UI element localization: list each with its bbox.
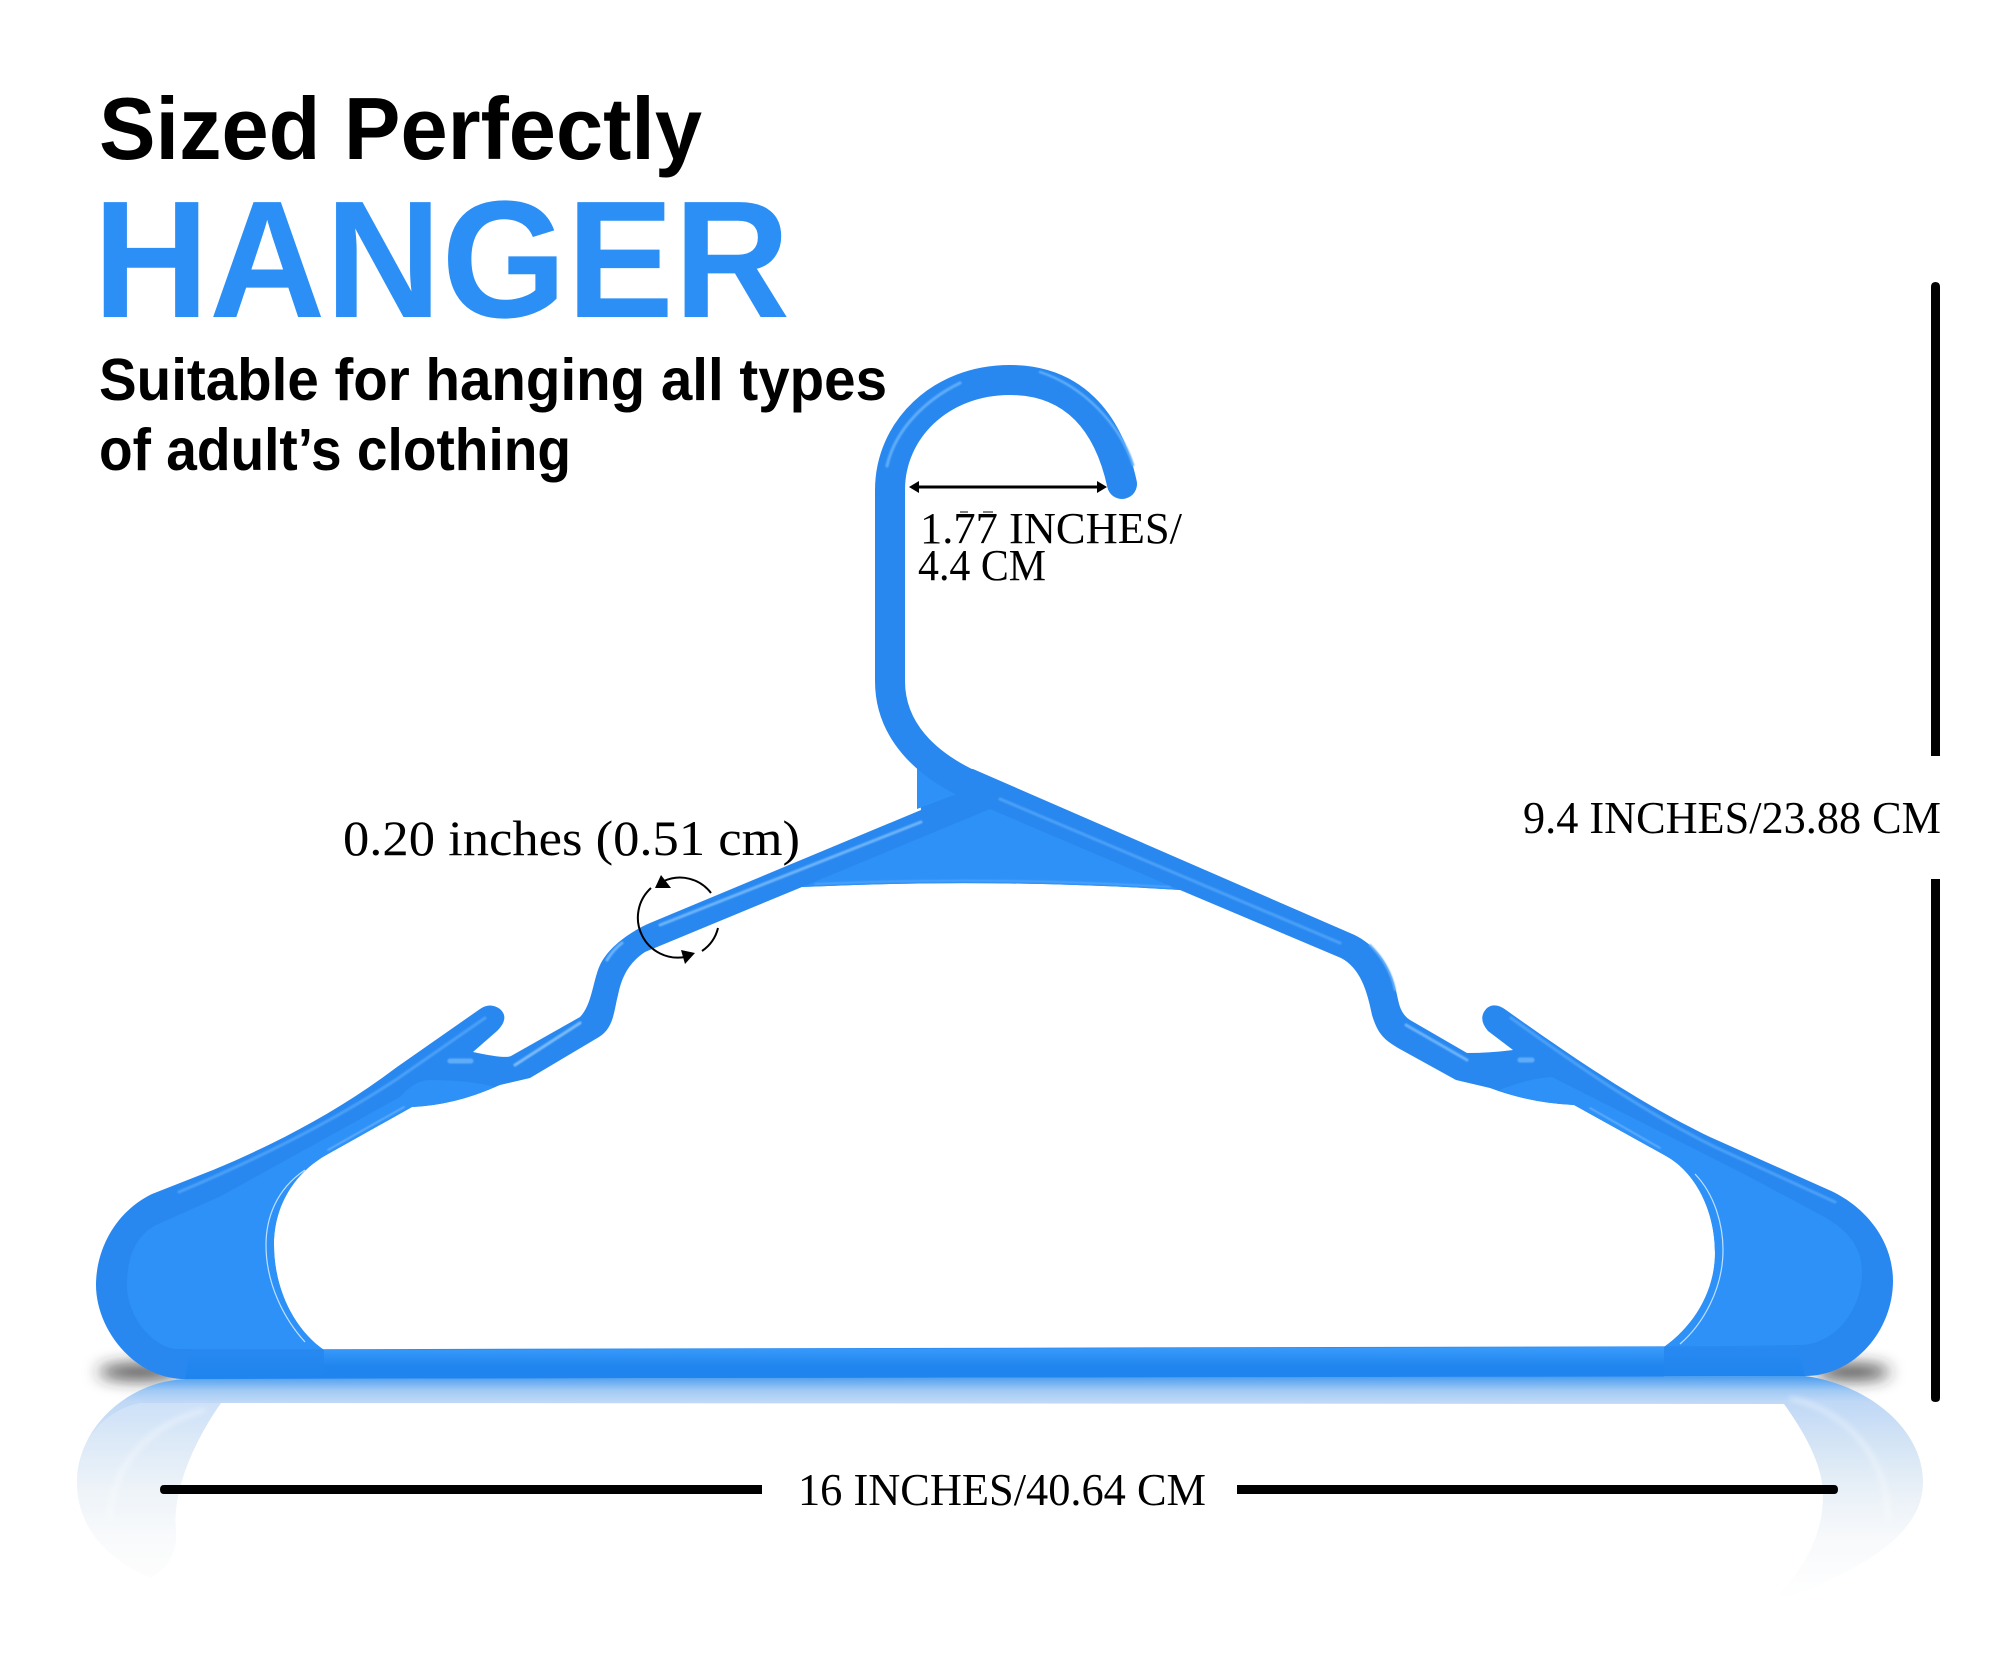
subtitle text block: Suitable for hanging all types [99, 347, 887, 413]
panel rim light, right [1680, 1174, 1723, 1344]
label: hook opening: 4.4 CM [918, 541, 1046, 590]
heading: HANGER: HANGER [93, 167, 790, 353]
floor shadow under hanger ends [98, 1364, 1890, 1380]
title: Sized Perfectly: Sized Perfectly [99, 79, 702, 178]
glossy highlights [179, 372, 1835, 1202]
label: height: 9.4 INCHES/23.88 CM [1523, 792, 1941, 843]
bottom bar ends [185, 1346, 1805, 1379]
bottom bar [324, 1347, 1664, 1378]
dimension: hook opening arrow [909, 481, 1107, 493]
small gusset behind hook [917, 765, 962, 809]
subtitle text block [99, 347, 887, 483]
icon: rotation arrows around tube [638, 875, 718, 964]
hanger reflection [77, 1376, 1923, 1605]
left flat panel [127, 1080, 495, 1350]
centre web triangle [802, 809, 1180, 890]
panel rim light, left [266, 1170, 305, 1342]
dimension: width line [160, 1485, 1838, 1494]
hanger body silhouette [96, 769, 1893, 1379]
blue hanger [96, 372, 1893, 1379]
label: hook opening [918, 504, 1183, 590]
label: width: 16 INCHES/40.64 CM [798, 1464, 1206, 1515]
right flat panel [1499, 1077, 1862, 1347]
subtitle text block: of adult’s clothing [99, 417, 571, 483]
dimension: height line [1931, 282, 1940, 1402]
hook tube [890, 380, 1122, 787]
label: hook opening: 1.77 INCHES/ [920, 504, 1183, 553]
label: tube thickness: 0.20 inches (0.51 cm) [343, 810, 800, 866]
